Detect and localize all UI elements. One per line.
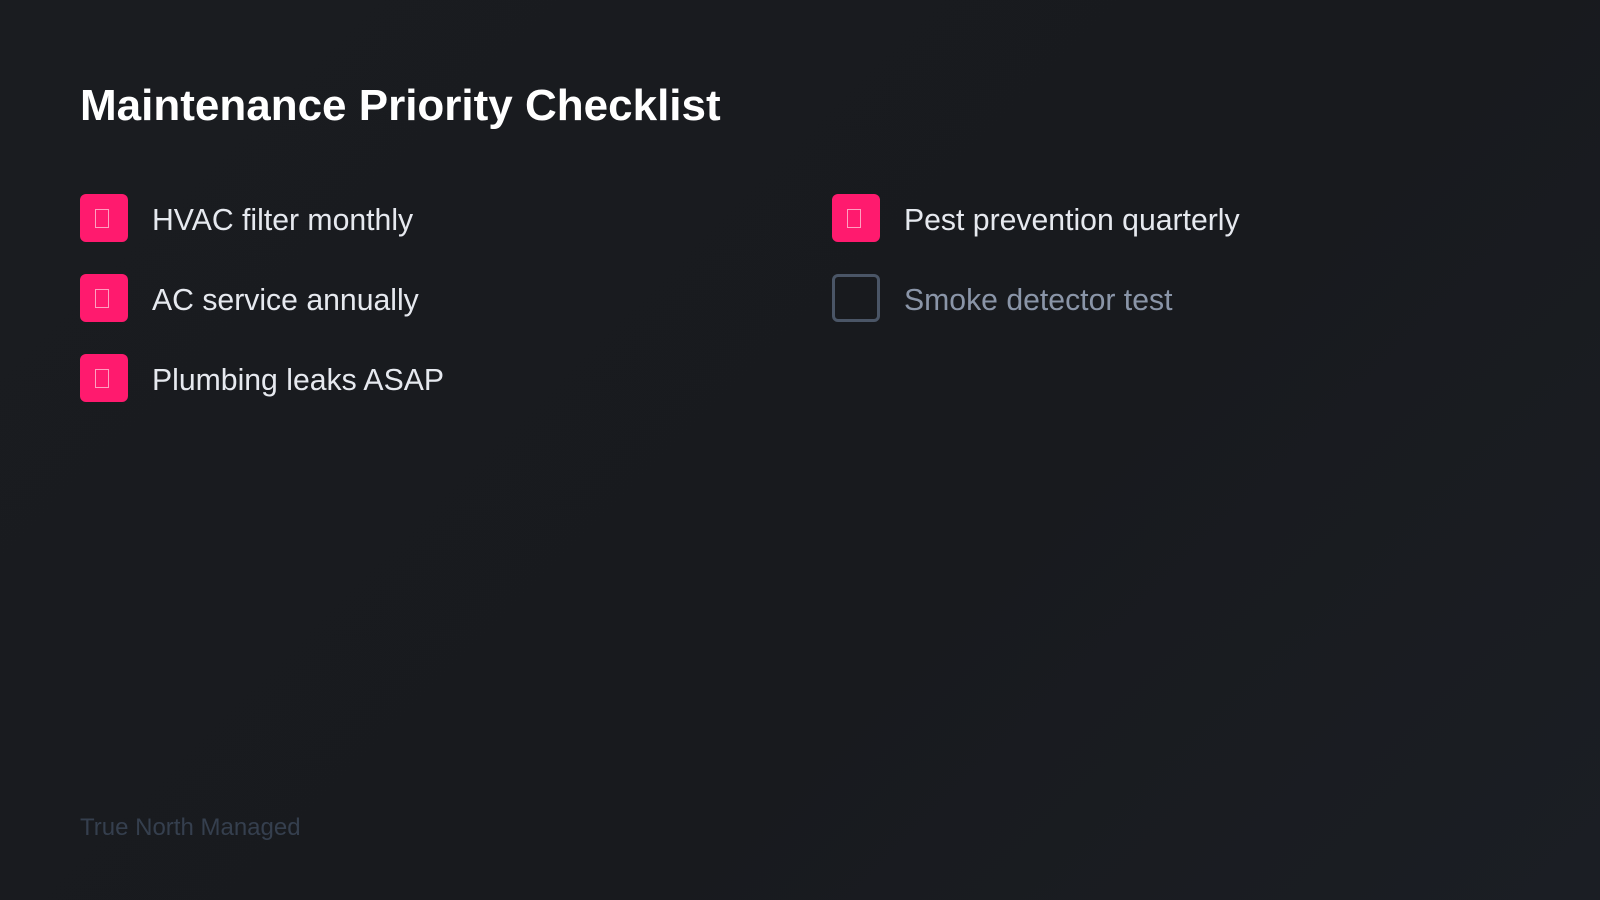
footer: True North Managed (80, 814, 301, 841)
item: HVAC filter monthly (80, 194, 413, 242)
item: Plumbing leaks ASAP: Plumbing leaks ASAP (152, 364, 444, 397)
item: Smoke detector test (unchecked): Smoke detector test (904, 284, 1172, 317)
item: Pest prevention quarterly (832, 194, 1240, 242)
item: AC service annually (80, 274, 419, 322)
item: Plumbing leaks ASAP (80, 354, 444, 402)
item: Smoke detector test (unchecked) (832, 274, 1172, 322)
item: Pest prevention quarterly: Pest prevention quarterly (904, 204, 1240, 237)
item: HVAC filter monthly: HVAC filter monthly (152, 204, 413, 237)
title: Maintenance Priority Checklist (80, 81, 721, 130)
item: AC service annually: AC service annually (152, 284, 419, 317)
